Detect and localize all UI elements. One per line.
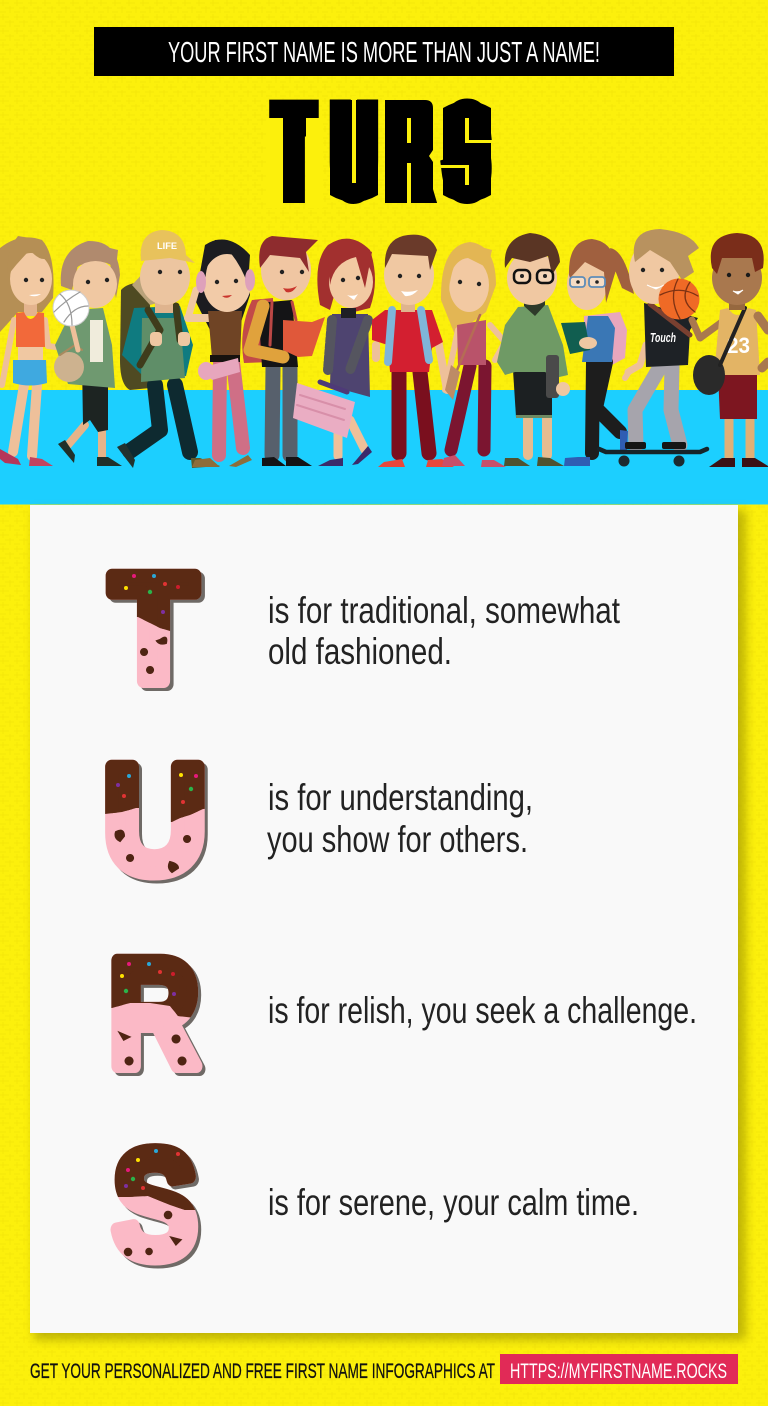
row U: text — [267, 777, 533, 860]
row T: candy letter: T — [111, 544, 196, 714]
header banner — [94, 27, 674, 76]
title: TURS: T — [275, 86, 313, 216]
person: boy in red shirt — [372, 235, 454, 467]
person: boy in yellow tank with shoulder bag: 23 — [727, 333, 750, 358]
row U: text: you show for others. — [267, 819, 528, 860]
person: boy with open book — [242, 236, 325, 466]
person: boy with glasses and laptop — [497, 233, 570, 466]
title: TURS: U — [332, 88, 376, 216]
row T: text — [268, 590, 621, 672]
row U: candy letter: U — [106, 738, 210, 908]
row R: candy letter — [111, 954, 206, 1076]
row R: candy letter: R — [112, 930, 202, 1102]
person: skater with basketball: Touch — [650, 330, 676, 345]
row S: candy letter: S — [116, 1122, 200, 1293]
person: skater with basketball — [599, 229, 722, 466]
title: TURS — [266, 86, 495, 216]
row R: candy letter: R — [109, 927, 199, 1099]
row S: candy letter: S — [113, 1119, 197, 1290]
person: boy in yellow tank with shoulder bag — [693, 233, 768, 467]
illustration: group of thirteen young people — [0, 229, 768, 468]
person: blonde girl — [441, 242, 506, 467]
person: hiker with cap and backpack — [117, 230, 220, 468]
title: TURS: S — [446, 86, 488, 216]
person: girl in orange top — [0, 236, 78, 466]
row S: candy letter — [110, 1143, 202, 1268]
row T: candy letter — [106, 568, 205, 691]
row U: candy letter: U — [103, 735, 207, 905]
row U: candy letter: U — [103, 735, 207, 905]
cyan floor band — [0, 390, 768, 504]
row S: text: is for serene, your calm time. — [268, 1182, 639, 1223]
person: hiker with cap and backpack: LIFE — [157, 241, 177, 251]
row T: candy letter: T — [111, 544, 196, 714]
row T: text: old fashioned. — [268, 631, 452, 672]
row S: candy letter: S — [113, 1119, 197, 1290]
person: girl with ponytail and tablet — [561, 239, 634, 466]
row R: candy letter: R — [109, 927, 199, 1099]
person: girl with volleyball — [53, 241, 122, 466]
main white panel — [30, 505, 738, 1333]
person: girl with pink bag — [293, 239, 375, 466]
row T: candy letter: T — [114, 547, 200, 717]
title: TURS: R — [390, 87, 428, 215]
row U: text: is for understanding, — [268, 777, 533, 818]
footer call to action: GET YOUR PERSONALIZED AND FREE FIRST NAME INFOGRAPHICS AT — [30, 1359, 495, 1383]
panel shadow — [34, 510, 746, 1340]
person: girl with headphones — [188, 240, 255, 467]
footer url badge — [500, 1354, 738, 1384]
row T: text: is for traditional, somewhat — [268, 590, 621, 631]
